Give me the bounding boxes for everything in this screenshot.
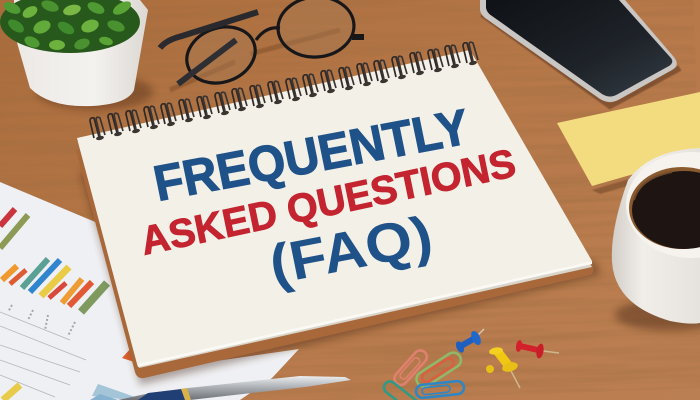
spiral binding xyxy=(90,42,478,141)
glasses shadow xyxy=(170,30,340,90)
white pot xyxy=(14,0,148,106)
eyeglasses xyxy=(160,0,364,92)
cup shadow xyxy=(615,299,700,331)
notebook cover xyxy=(76,55,594,378)
yellow sticky note xyxy=(557,92,700,194)
pen xyxy=(118,376,351,400)
green clip xyxy=(381,379,420,400)
glasses bridge and arms xyxy=(256,28,280,40)
blue pin xyxy=(454,329,484,354)
phone screen xyxy=(486,0,672,96)
push pins xyxy=(454,329,559,388)
yellow pin xyxy=(486,346,520,388)
red and teal clip xyxy=(414,350,464,389)
phone shadow xyxy=(482,14,680,106)
right lens xyxy=(276,0,356,60)
heading: FREQUENTLY: FREQUENTLY xyxy=(149,99,474,212)
chart paper xyxy=(0,182,299,400)
red pin xyxy=(515,340,559,359)
bar chart on paper xyxy=(0,209,107,312)
pink clip xyxy=(392,348,430,388)
coffee cup xyxy=(612,148,700,331)
pot shadow xyxy=(37,74,153,110)
smartphone xyxy=(480,0,680,106)
notebook shadow xyxy=(80,170,600,385)
notebook xyxy=(76,42,600,385)
phone body xyxy=(480,0,677,102)
notebook page stack xyxy=(78,52,592,368)
notebook top page xyxy=(77,50,592,364)
green leaves xyxy=(0,0,140,53)
cup rim xyxy=(626,152,700,258)
heading: (FAQ): (FAQ) xyxy=(264,204,437,296)
left lens xyxy=(179,18,263,92)
potted plant xyxy=(0,0,153,110)
cup body xyxy=(612,148,700,324)
paper clips xyxy=(381,348,464,400)
coffee xyxy=(629,167,700,249)
chart labels and rules xyxy=(0,305,86,397)
lower small chart xyxy=(3,347,135,400)
heading: ASKED QUESTIONS: ASKED QUESTIONS xyxy=(137,141,519,264)
blue clip xyxy=(415,381,464,398)
